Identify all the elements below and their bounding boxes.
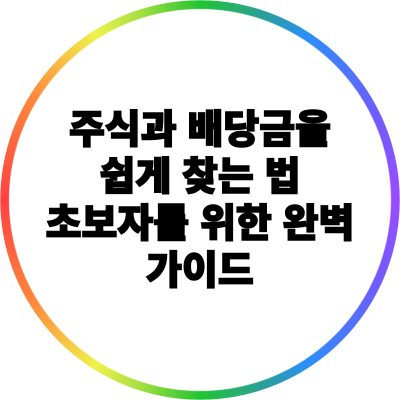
- title: 초보자를 위한 완벽: [46, 203, 354, 246]
- title: 주식과 배당금을: [69, 109, 331, 152]
- title: [46, 108, 354, 293]
- title: 가이드: [146, 250, 254, 293]
- title: 쉽게 찾는 법: [99, 156, 301, 199]
